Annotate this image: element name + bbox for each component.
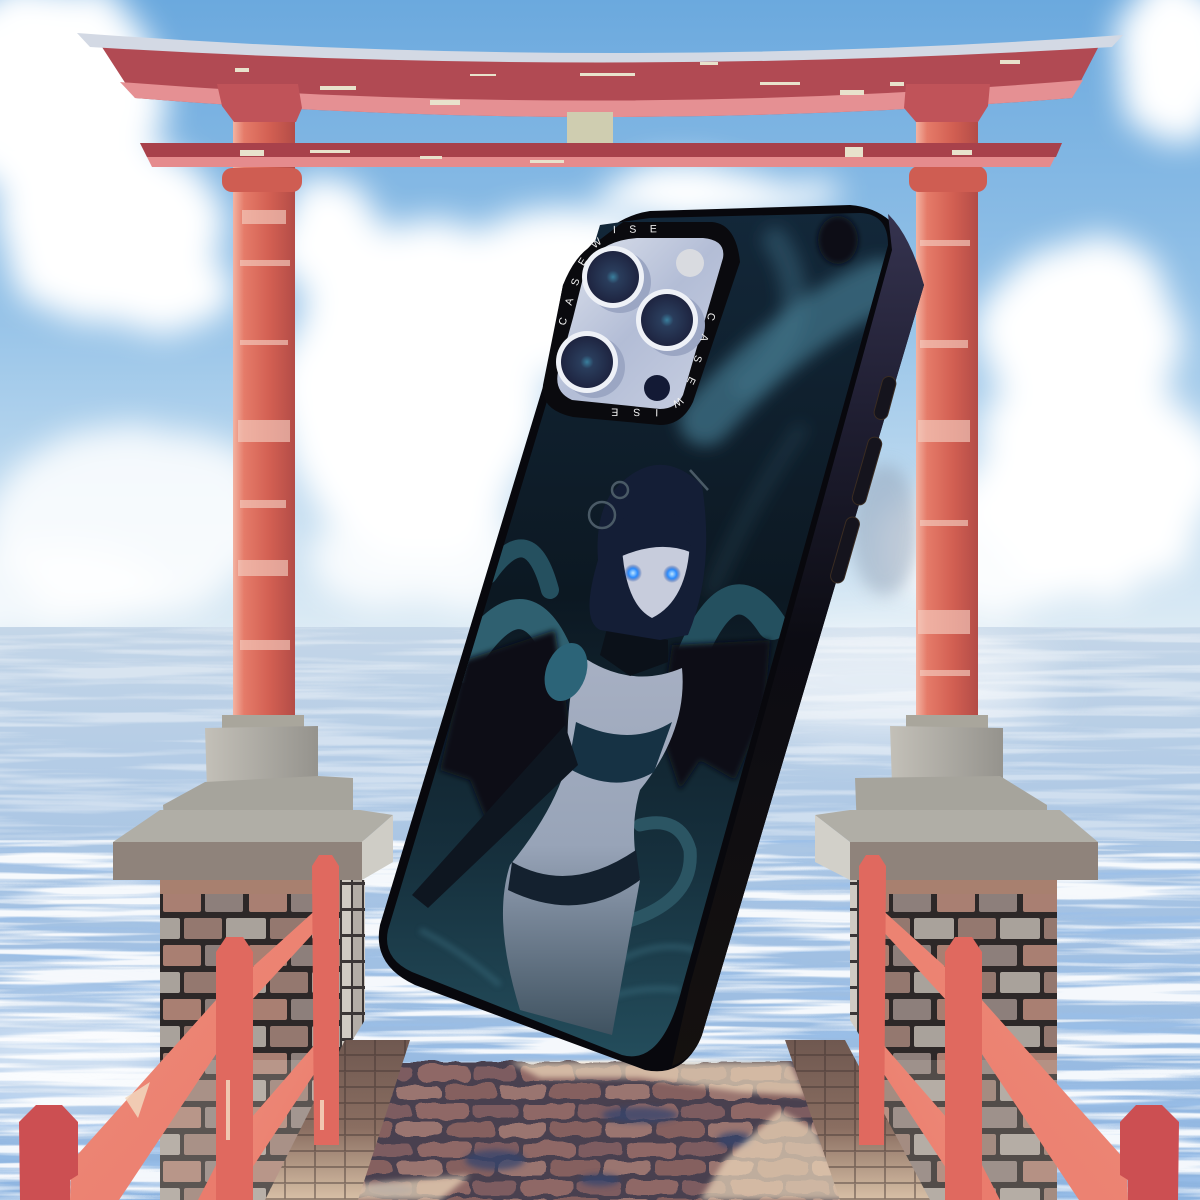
gown hip sash [508, 850, 640, 905]
hair [589, 465, 706, 640]
cloud shadow behind phone [851, 464, 919, 596]
figure in gown [412, 465, 708, 1035]
pillar weathering [238, 210, 970, 676]
right pillar [916, 100, 978, 720]
sea [0, 625, 1200, 1200]
gown [503, 655, 683, 1035]
paved walkway [265, 1040, 930, 1200]
top beam [100, 44, 1100, 117]
brand text: CASEWISE [612, 313, 715, 416]
camera plate [557, 238, 723, 409]
sleeve [412, 725, 578, 908]
background foliage [705, 240, 880, 590]
sunlit stones [340, 1062, 850, 1200]
upper rail [70, 897, 330, 1200]
dark wings [440, 630, 770, 830]
left brick pier [160, 880, 365, 1200]
paint wear [125, 1080, 324, 1140]
right curb [785, 1040, 930, 1200]
case body [379, 205, 924, 1071]
shoulder ornament [544, 643, 588, 701]
brand text: CASEWISE [559, 225, 656, 325]
hair ornament [589, 470, 708, 528]
brand text [559, 225, 715, 416]
right stone base [815, 715, 1098, 880]
camera ring [543, 222, 740, 425]
gown waist band [568, 722, 672, 783]
sky [0, 0, 1200, 630]
right railing [859, 855, 1179, 1200]
side buttons [829, 375, 897, 585]
top creature [818, 216, 858, 264]
flash [676, 249, 704, 277]
mid post [216, 937, 253, 1200]
microphone [644, 375, 670, 401]
phone case [378, 205, 924, 1072]
top beam underside [120, 80, 1083, 117]
left curb [265, 1040, 410, 1200]
lower beam [140, 143, 1062, 167]
centre strut [567, 112, 613, 144]
seabed ripples [420, 930, 695, 1000]
torii gate [77, 33, 1123, 720]
top beam cap [77, 33, 1123, 62]
far post [312, 855, 339, 1145]
left railing [19, 855, 339, 1200]
puddles [365, 1107, 753, 1196]
paint flakes [235, 60, 1020, 163]
case artwork [387, 213, 888, 1056]
pillar collars [222, 166, 987, 192]
face [622, 546, 690, 618]
eyes [624, 564, 642, 582]
left stone base [113, 715, 393, 880]
case side [672, 214, 924, 1066]
near post [19, 1105, 78, 1200]
clouds [0, 0, 1200, 635]
beam supports [217, 84, 302, 122]
tentacles [462, 548, 772, 925]
lenses [556, 246, 705, 401]
lower rail [252, 1027, 330, 1168]
left pillar [233, 100, 295, 720]
right brick pier [850, 880, 1057, 1200]
collar [600, 631, 668, 676]
